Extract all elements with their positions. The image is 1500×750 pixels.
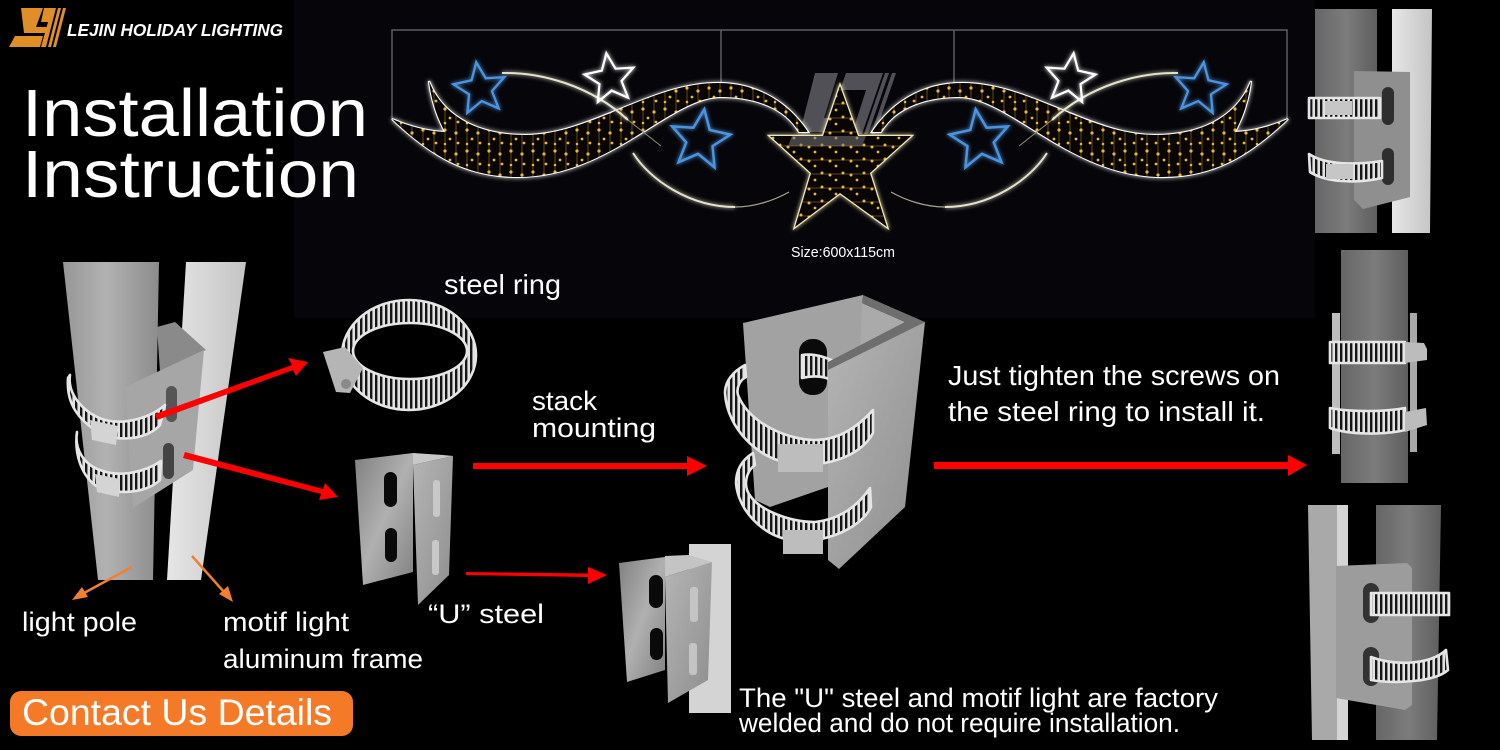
plate slots	[163, 386, 177, 479]
panel: side view	[1330, 250, 1427, 483]
icon: stacked bracket with rings	[725, 295, 925, 569]
arrow: stack mounting	[473, 456, 707, 476]
label: motif light aluminum frame	[223, 607, 423, 674]
logo mark	[9, 8, 66, 47]
label: stack mounting	[532, 386, 656, 443]
label: light pole: light pole	[22, 607, 137, 637]
support frame	[392, 30, 1287, 119]
panel: rear view	[1308, 505, 1449, 740]
title: Instruction	[22, 137, 359, 212]
icon: steel ring	[323, 300, 476, 410]
brand name: LEJIN HOLIDAY LIGHTING	[67, 20, 283, 40]
arrow: to welded bracket	[466, 567, 607, 584]
bracket rim	[828, 295, 925, 374]
arrow: install	[934, 455, 1307, 476]
contact button: Contact Us Details	[22, 692, 332, 733]
watermark bar over star	[788, 136, 866, 146]
light pole	[63, 262, 159, 580]
right half decoration	[872, 50, 1288, 207]
bracket back plate	[743, 295, 863, 507]
small ring segment	[802, 355, 844, 384]
bracket side	[828, 322, 925, 569]
text: tighten instruction: Just tighten the screws on	[948, 360, 1280, 391]
label: motif light aluminum frame: aluminum frame	[223, 644, 423, 674]
aluminum frame	[167, 262, 246, 580]
arrow: to steel ring	[155, 358, 308, 420]
panel: assembly on pole	[63, 262, 246, 580]
label: steel ring: steel ring	[444, 269, 561, 300]
back slot	[799, 339, 827, 395]
bracket inside	[157, 322, 206, 372]
upper ring	[725, 365, 873, 464]
label: motif light aluminum frame: motif light	[223, 607, 350, 637]
arrow: to U steel	[183, 452, 338, 500]
label: U steel: “U” steel	[428, 599, 544, 629]
bracket interior	[860, 303, 905, 352]
icon: U steel bracket	[355, 453, 453, 605]
arrow: frame leader	[192, 556, 233, 602]
size label: Size:600x115cm	[791, 244, 895, 261]
watermark logo	[800, 73, 896, 134]
ring housings	[778, 444, 823, 472]
centre star	[770, 86, 911, 227]
panel: motif light product	[392, 30, 1288, 261]
upper ring	[68, 375, 165, 438]
title	[22, 76, 368, 212]
left half decoration	[392, 50, 808, 207]
icon: bracket welded on frame	[619, 544, 731, 713]
lower ring	[76, 432, 161, 492]
arrow: light pole leader	[72, 567, 132, 600]
upper ring housing	[90, 420, 118, 445]
bracket plate	[125, 350, 204, 508]
title: Installation	[22, 76, 368, 151]
label: stack mounting: mounting	[532, 413, 656, 443]
text: factory welded note	[738, 683, 1219, 738]
logo	[9, 8, 283, 47]
label: stack mounting: stack	[532, 386, 598, 416]
text: tighten instruction	[948, 360, 1280, 427]
lower ring	[736, 453, 871, 541]
text: factory welded note: welded and do not require installation.	[738, 708, 1180, 738]
lower ring housing	[95, 474, 120, 497]
panel: front view	[1309, 9, 1432, 233]
text: tighten instruction: the steel ring to install it.	[948, 396, 1265, 427]
text: factory welded note: The "U" steel and motif light are factory	[739, 683, 1219, 713]
